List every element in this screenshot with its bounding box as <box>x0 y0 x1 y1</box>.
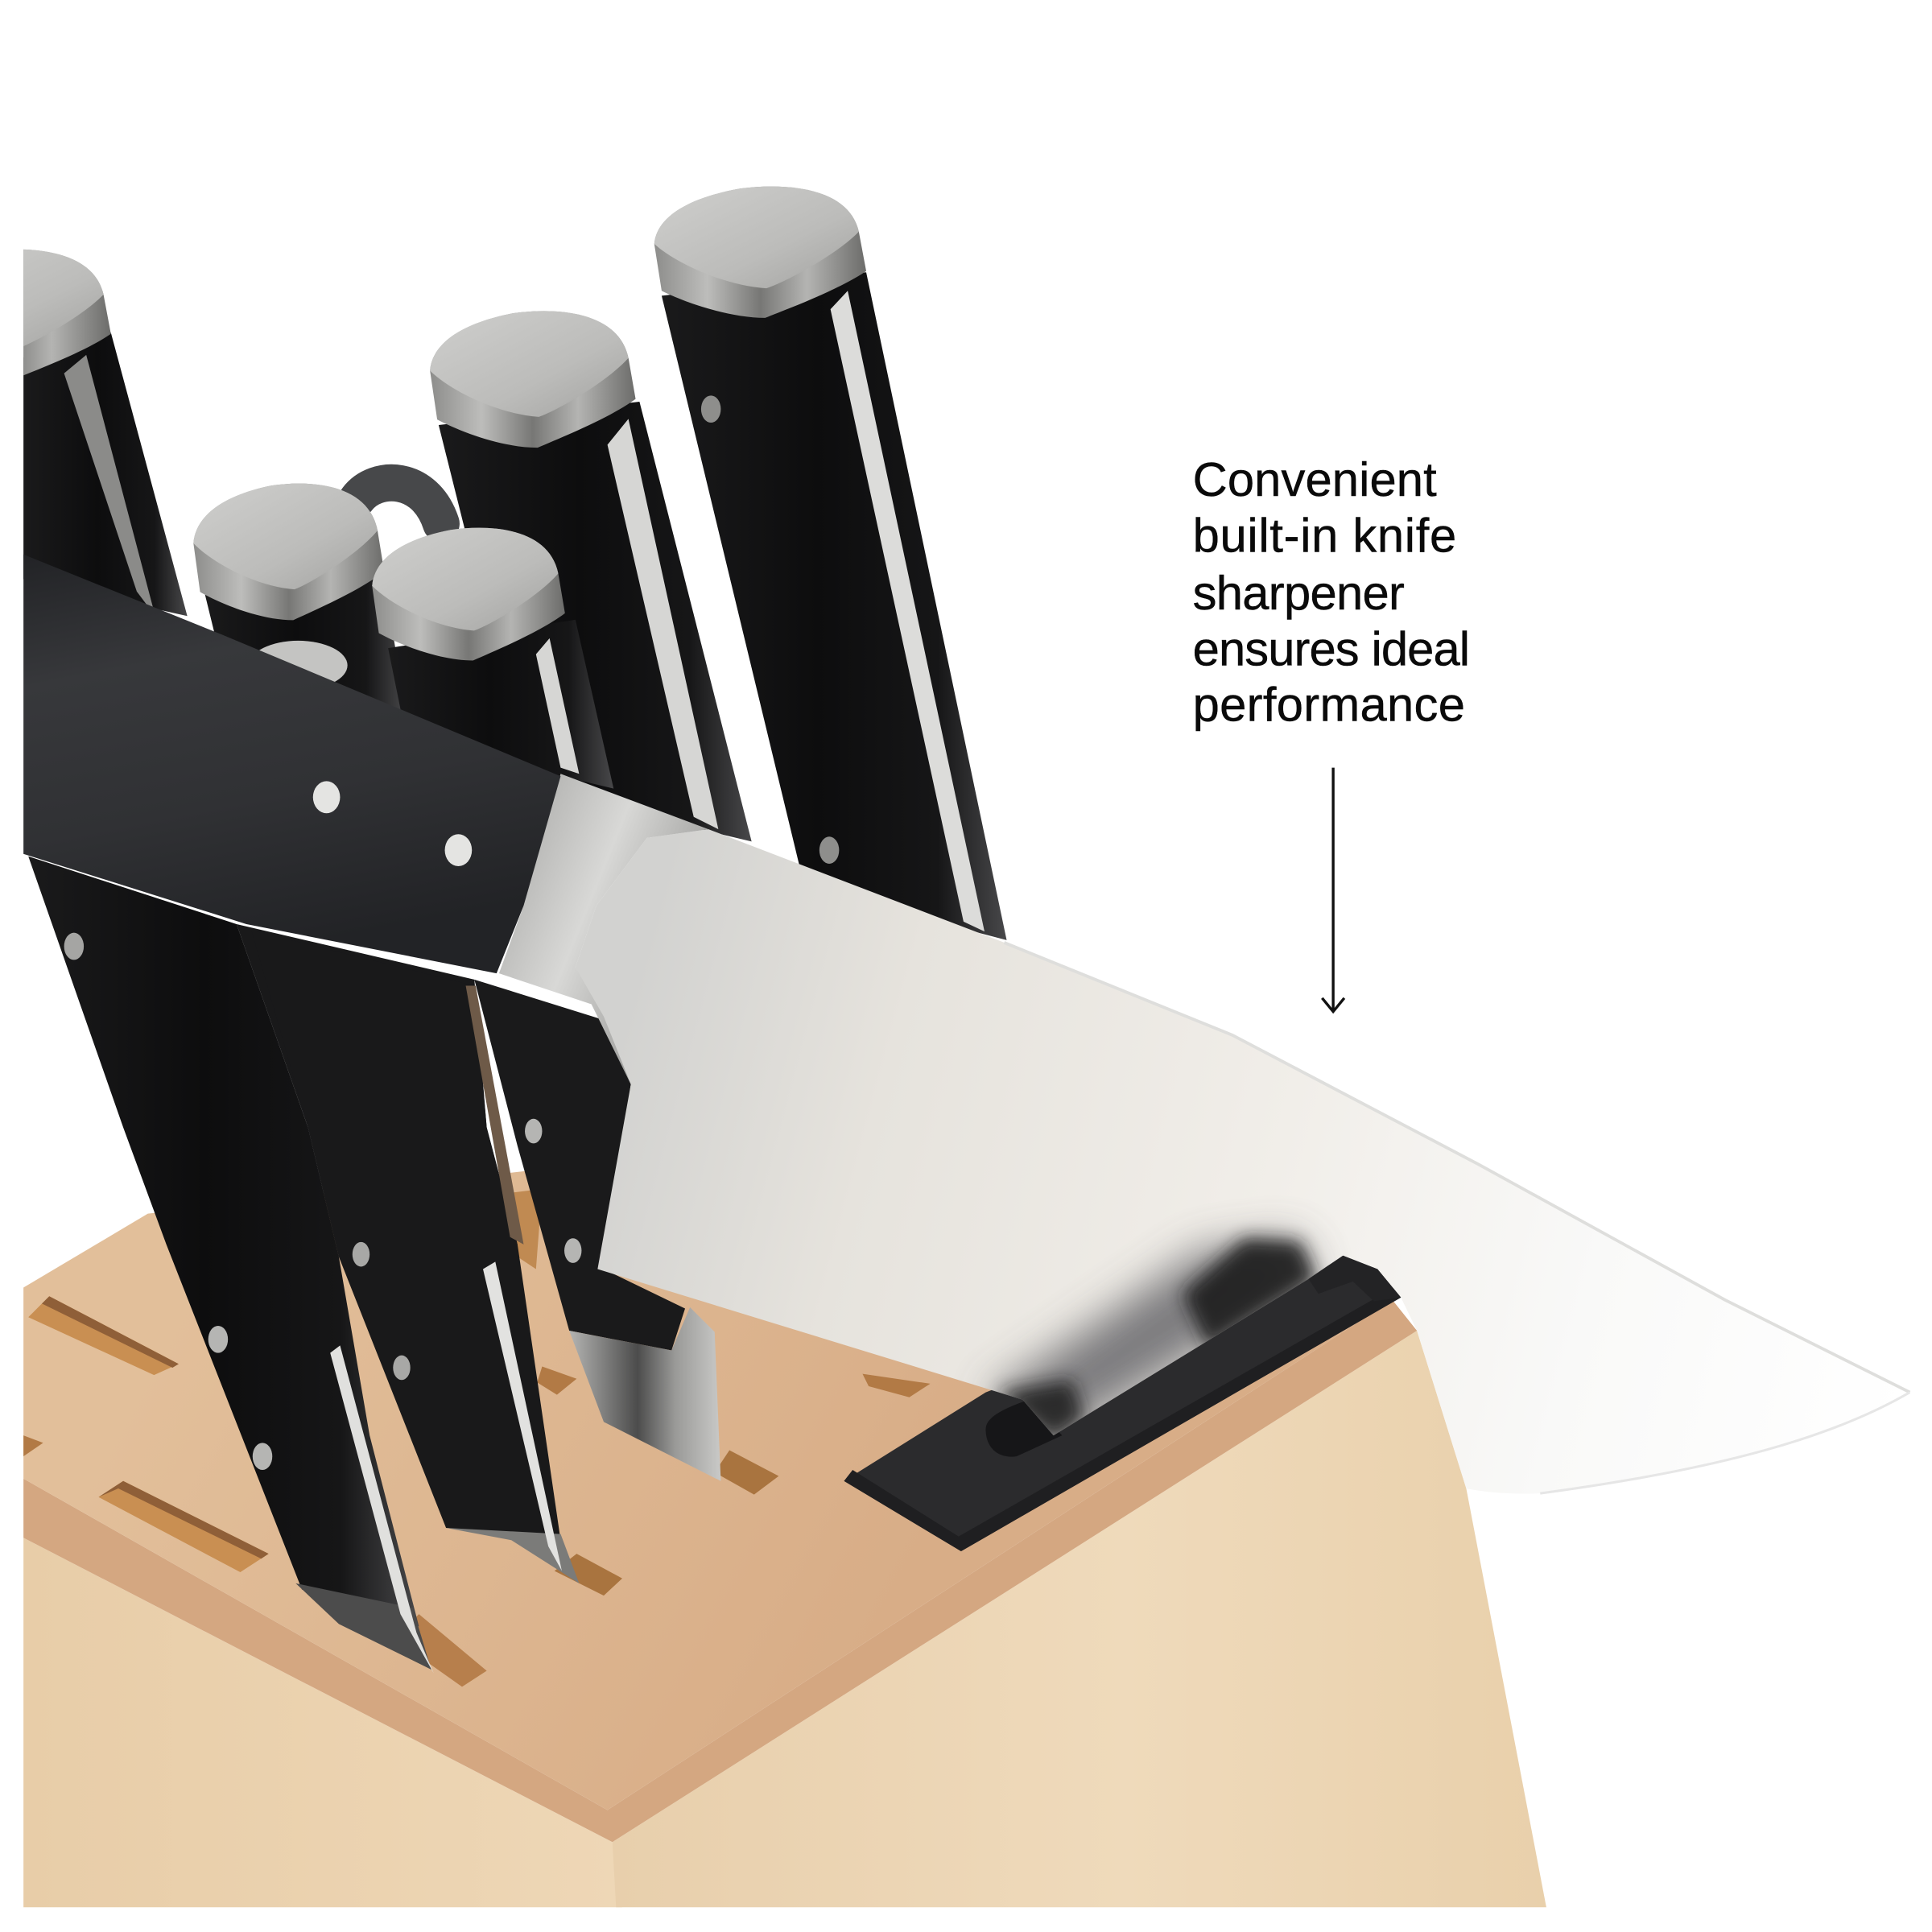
sharpener <box>844 1256 1401 1551</box>
scissors loop handle <box>357 483 441 524</box>
knife slots <box>23 1189 931 1686</box>
knife: back centre handle <box>430 311 752 841</box>
handle rivets <box>313 781 340 813</box>
callout text: performance <box>1193 677 1465 731</box>
knife: far left handle <box>23 250 188 617</box>
chef knife blade <box>576 829 1909 1494</box>
knife: small left handle <box>193 484 407 715</box>
wooden knife block <box>23 1170 1546 1907</box>
block left face <box>23 1538 622 1907</box>
chef knife bolster <box>499 774 708 1084</box>
sharpener lip <box>1309 1256 1401 1301</box>
knife: hidden cap <box>259 641 348 682</box>
block top rim <box>23 1300 1417 1842</box>
knife: front handle <box>28 857 434 1674</box>
knife: middle front handle <box>237 924 579 1583</box>
knife: small centre handle <box>372 528 613 789</box>
arrow <box>1322 768 1344 1012</box>
callout text: ensures ideal <box>1193 622 1470 676</box>
block right face <box>613 1331 1546 1907</box>
callout text: sharpener <box>1193 566 1405 620</box>
blade shadow at sharpener <box>985 1238 1316 1442</box>
knife: back right handle <box>654 187 1007 940</box>
block top surface <box>23 1170 1393 1810</box>
callout text <box>1193 452 1470 731</box>
callout text: Convenient <box>1193 452 1437 506</box>
callout text: built-in knife <box>1193 509 1456 563</box>
knife: rear front handle <box>474 980 720 1481</box>
chef knife handle <box>23 555 560 973</box>
